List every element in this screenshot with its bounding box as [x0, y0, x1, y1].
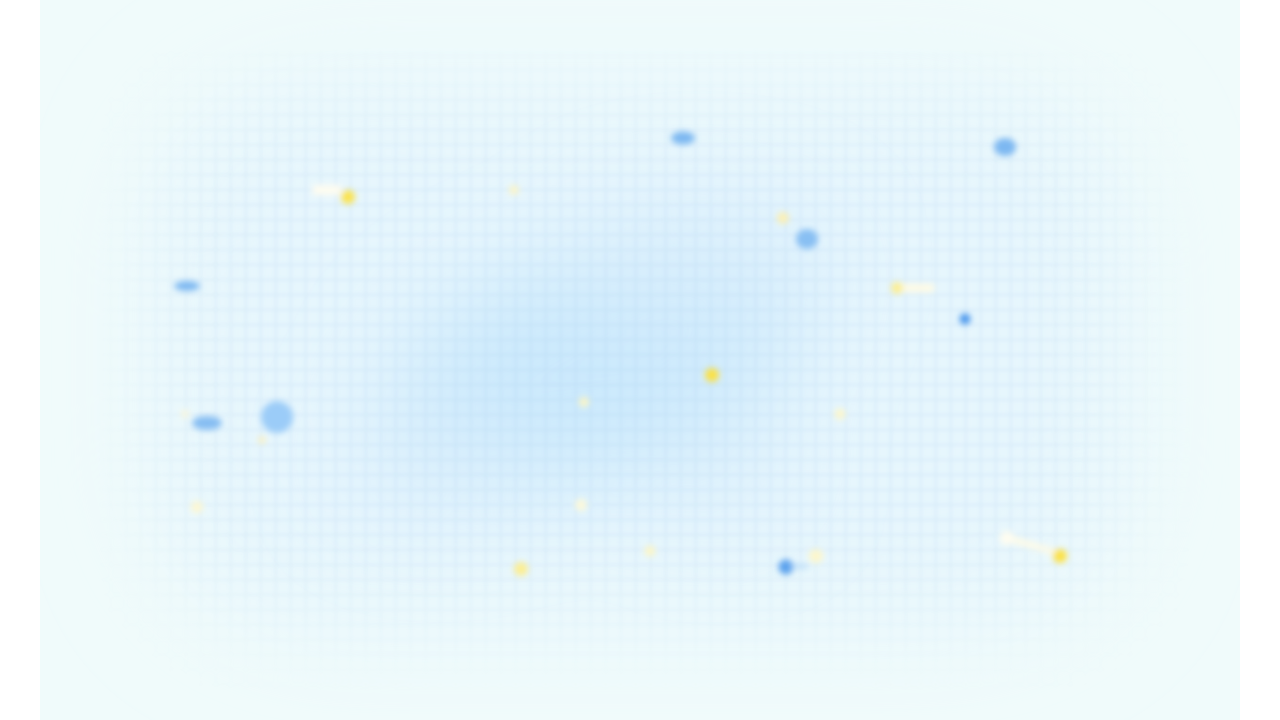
- grid overlay: [186, 129, 1086, 580]
- yellow markers: [181, 185, 1067, 576]
- blue markers: [174, 132, 1016, 574]
